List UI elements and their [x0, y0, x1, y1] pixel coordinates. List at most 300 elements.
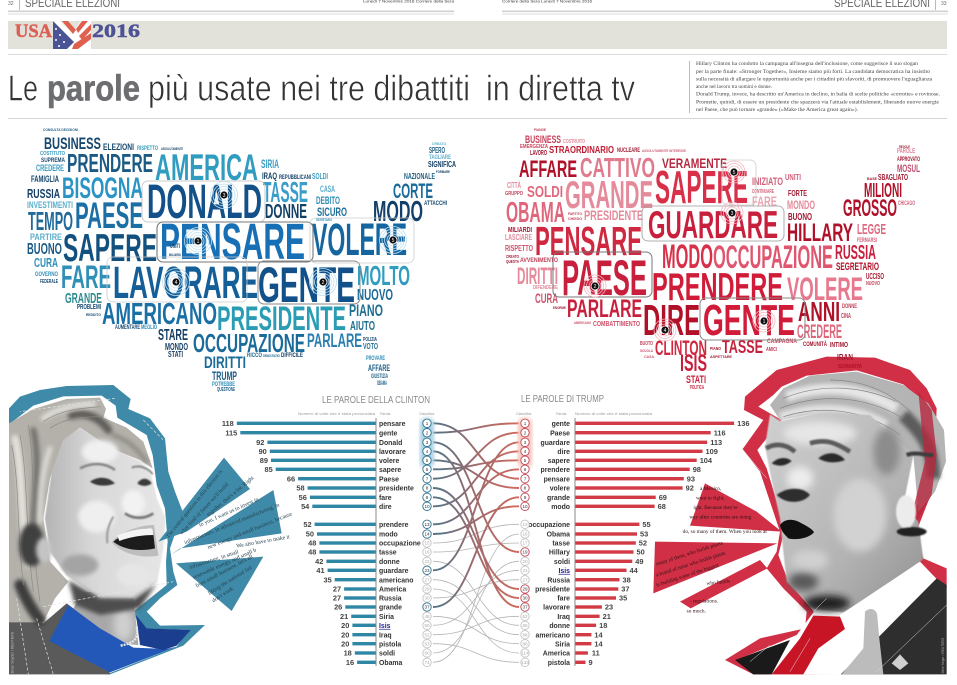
values: 14 [594, 639, 604, 648]
word cloud: Clinton: ASSOLUTAMENTE [161, 147, 183, 151]
word cloud: Clinton: PRENDERE [67, 148, 153, 178]
bars [237, 422, 376, 664]
word cloud: Clinton: DIFFICILE [281, 353, 303, 359]
word cloud: Trump: FARE [752, 193, 777, 209]
values: 48 [308, 548, 316, 557]
word cloud: Trump: MILIONI [864, 180, 902, 202]
portrait: Donald Trump: a brand of mine who builds plants [655, 550, 726, 579]
words: America [543, 651, 570, 658]
word cloud: Clinton: AMERICANO [102, 296, 217, 331]
words: Isis [379, 623, 391, 630]
portrait: Hillary Clinton: from small business, let's all [194, 553, 255, 589]
words: presidente [379, 486, 414, 493]
words: guardare [379, 568, 409, 575]
words: Paese [550, 430, 570, 437]
words: pensare [379, 421, 406, 428]
word cloud: Trump: PAROLE [897, 148, 915, 155]
word cloud: Trump: AFFARE [519, 156, 577, 183]
portrait: Donald Trump: ight. Because they're [693, 505, 738, 511]
word cloud: Clinton: DEMOCRATICI [263, 354, 280, 358]
word cloud: Trump: CHICAGO [898, 201, 915, 207]
word cloud: Trump: INTIMO [830, 340, 848, 349]
word cloud: Trump: MOSUL [897, 163, 920, 175]
rank circles: 9 [426, 495, 429, 500]
word cloud: Trump: AVVENIMENTO [520, 258, 558, 264]
portrait: Hillary Clinton: what kind of future we'll build [178, 481, 230, 536]
rank circles: 52 [424, 632, 430, 637]
words: sapere [379, 467, 401, 474]
words: gente [379, 430, 398, 437]
word cloud: Trump: PRESIDENTE [584, 207, 643, 223]
shoulder [9, 603, 110, 674]
word cloud: Trump: MILIARDI [508, 227, 532, 234]
face [45, 428, 166, 598]
rank circles: 133 [521, 660, 529, 665]
outline shape [725, 357, 947, 674]
word cloud: Clinton: SIRIA [261, 157, 279, 171]
word cloud: Trump: MODO [662, 238, 713, 276]
chart heading: Clinton: LE PAROLE DELLA CLINTON [322, 395, 430, 406]
words: Hillary [549, 550, 570, 557]
values: 16 [346, 658, 354, 667]
portrait: Hillary Clinton: infrastructure, in small [188, 548, 240, 571]
word cloud: Clinton: COSTITUTO [40, 151, 65, 157]
word cloud: Trump: COMUNITÀ [803, 339, 827, 348]
values: 20 [341, 630, 349, 639]
word cloud: Trump: VERAMENTE [662, 155, 727, 171]
word cloud: Trump: IRAN [837, 352, 853, 362]
portrait: Hillary Clinton [9, 385, 294, 674]
rank markers: Trump: 2 [594, 284, 597, 290]
values: 35 [619, 594, 627, 603]
page header left: 32 [8, 1, 14, 7]
word cloud: Trump: UNITI [785, 173, 801, 182]
rank circles: 7 [524, 476, 527, 481]
rank markers: Clinton: 4 [175, 280, 178, 286]
values: 21 [340, 612, 348, 621]
word cloud: Clinton: SIGNIFICA [428, 160, 456, 169]
portrait: Donald Trump: many of them, who builds plants [655, 539, 724, 568]
rank circles: 37 [424, 605, 430, 610]
rank circles: 20 [522, 559, 528, 564]
eyes and brows [80, 464, 153, 543]
word cloud: Trump: LEGGE [857, 221, 886, 238]
word cloud: Trump: COMBATTIMENTO [593, 321, 640, 328]
jacket [49, 605, 177, 672]
column headers: Numero di volte che è stata pronunciata [298, 412, 375, 416]
brows and eyes [766, 441, 933, 502]
rank circles: 10 [424, 504, 430, 509]
values: 113 [710, 438, 722, 447]
word cloud: Trump: ANNI [798, 296, 840, 327]
word cloud: Trump: OCCUPAZIONE [713, 239, 833, 275]
rank circles: 22 [424, 559, 430, 564]
words: dire [557, 449, 570, 456]
words: Obama [379, 660, 403, 667]
values: 118 [222, 419, 234, 428]
portrait: Hillary Clinton: to you. I want us to invest in [198, 497, 260, 528]
shirt collar [817, 562, 937, 674]
rank circles: 6 [426, 467, 429, 472]
values: 92 [256, 438, 264, 447]
word cloud: Trump: ISIS [680, 350, 707, 377]
word cloud: Trump: CAMPAGNA [767, 339, 798, 345]
values: 27 [333, 594, 341, 603]
values: 37 [621, 585, 630, 594]
word cloud: Clinton: REPUBBLICANI [279, 174, 311, 181]
word cloud: Clinton: FARE [61, 259, 111, 295]
word cloud: Trump: MONDO [787, 198, 815, 212]
face [765, 412, 923, 612]
column headers: Parola [556, 412, 566, 416]
word cloud: Clinton: OBAMA [377, 381, 387, 387]
values: 56 [299, 493, 307, 502]
rank markers: Trump: 4 [664, 328, 667, 334]
tie [772, 616, 845, 674]
word cloud: Trump: RISPETTO [505, 244, 533, 253]
words: grande [379, 605, 402, 612]
word cloud: Clinton: PROVARE [366, 356, 385, 362]
portrait: Donald Trump: a Mexico, [700, 486, 721, 492]
word cloud: Trump: ASSOLUTAMENTE INTERESSE [642, 149, 687, 153]
word cloud: Clinton: FAMIGLIA [31, 174, 59, 184]
word cloud: Trump: FORTE [788, 189, 807, 198]
word cloud: Clinton: PARLARE [307, 331, 362, 352]
dark hair behind ear [19, 523, 44, 567]
portrait: Donald Trump: do, so many of them. When you look at [683, 528, 767, 535]
rank circles: 88 [522, 632, 528, 637]
rank markers: Clinton: 3 [223, 193, 226, 199]
top-five halo [518, 418, 532, 468]
word cloud: Clinton: AIUTO [350, 318, 375, 333]
values: 52 [639, 539, 647, 548]
rank circles: 50 [424, 623, 430, 628]
word cloud: Trump: SEGRETARIO [836, 261, 879, 273]
values: 50 [636, 548, 645, 557]
words: donne [549, 623, 570, 630]
left dark shoulder [735, 640, 790, 674]
portrait: Donald Trump: - regulations. [690, 598, 718, 604]
word cloud: Trump: SCHIARITA [838, 364, 862, 370]
word cloud: Trump: NUCLEARE [617, 148, 640, 154]
rank circles: 3 [426, 440, 429, 445]
values: 50 [306, 530, 314, 539]
page header right [502, 0, 948, 14]
red inside hair [913, 392, 937, 525]
words [379, 421, 421, 667]
word cloud: Trump: TASSE [722, 337, 763, 357]
word cloud: Trump: CASA [644, 354, 654, 359]
words: Obama [547, 532, 570, 539]
values: 104 [700, 456, 713, 465]
word cloud: Clinton: PAESE [75, 195, 143, 236]
words: volere [550, 486, 570, 493]
words: presidente [535, 587, 570, 594]
values: 20 [341, 621, 349, 630]
word cloud: Clinton: BUONO [27, 241, 62, 258]
rank circles: 3 [524, 440, 527, 445]
rank circles: 9 [524, 495, 527, 500]
column headers: Parola [380, 412, 390, 416]
values: 53 [640, 530, 648, 539]
rank circles: 8 [524, 486, 527, 491]
word cloud: Clinton: IRAQ [262, 171, 277, 181]
rank circles: 10 [522, 504, 528, 509]
rank circles: 1 [426, 421, 429, 426]
word cloud: Clinton: AMERICA [155, 147, 258, 188]
word cloud: Clinton: PIANO [349, 301, 383, 320]
title: più usate nei tre dibattiti [148, 68, 470, 108]
suit jacket [841, 578, 947, 674]
word cloud: Trump: SAPERE [655, 161, 748, 213]
column headers: Classifica [419, 412, 434, 416]
words: Paese [379, 476, 399, 483]
word cloud: Trump: NUOVO [866, 281, 880, 287]
photo credit: Brian Snyder / REUTERS [10, 631, 14, 673]
rank circles: 30 [424, 596, 430, 601]
word cloud: Trump: BASE [867, 176, 877, 181]
values: 116 [714, 428, 726, 437]
word cloud: Clinton: BUSINESS [44, 134, 101, 153]
word cloud: Trump: GROSSO [843, 195, 897, 222]
values: 136 [737, 419, 749, 428]
page header right: 33 [941, 1, 947, 7]
word cloud: Trump: PRENDERE [652, 266, 783, 309]
word cloud: Trump: COSTRUITO [563, 139, 585, 145]
word cloud: Trump: REGOLE [899, 145, 910, 149]
words: Russia [547, 577, 570, 584]
rank circles: 29 [522, 587, 528, 592]
word cloud: Clinton: MEGLIO [141, 325, 157, 331]
values: 93 [687, 474, 695, 483]
rank circles: 21 [522, 568, 528, 573]
column headers: Numero di volte che è stata pronunciata [575, 412, 652, 416]
values: 35 [323, 575, 332, 584]
rank markers: Trump [584, 161, 775, 341]
rank circles: 13 [522, 522, 528, 527]
word cloud: Trump: LASCIARE [505, 233, 532, 242]
word cloud: Trump: DIFENDERE [533, 285, 559, 291]
word cloud: Clinton: GRANDE [65, 290, 102, 307]
words: lavorare [543, 605, 570, 612]
portrait: Donald Trump: want to fight, [696, 494, 725, 501]
values: 41 [316, 566, 325, 575]
speech wedges [690, 483, 782, 532]
rank circles [521, 419, 529, 666]
values: 66 [287, 474, 295, 483]
word cloud: Clinton: POTREBBE [212, 382, 235, 388]
words: Russia [379, 596, 402, 603]
words: Siria [379, 614, 394, 621]
intro text block: anche nel lavoro tra uomini e donne. [696, 84, 772, 90]
words: fare [557, 596, 570, 603]
word cloud: Clinton: UNITI [170, 244, 180, 250]
word cloud: Trump: PENSARE [535, 218, 642, 264]
flag pin [892, 654, 908, 670]
portrait: Donald Trump: who builds [706, 579, 730, 587]
words: Iraq [379, 632, 392, 639]
values: 69 [659, 493, 667, 502]
word cloud: Clinton: PROBLEMI [77, 304, 101, 311]
portrait: Hillary Clinton: don't work [211, 586, 235, 604]
words: grande [547, 495, 570, 502]
word cloud: Trump: STATI [686, 374, 706, 386]
word cloud: Clinton: AUMENTARE [115, 325, 140, 331]
word cloud: Clinton: SPERO [429, 146, 445, 155]
word cloud: Trump: CITTÀ [507, 181, 521, 190]
logo: USA 2016 [15, 21, 140, 49]
word cloud: Trump: DIRE [643, 296, 700, 345]
word cloud: Clinton: CURA [34, 255, 58, 270]
words: occupazione [528, 522, 570, 529]
word cloud: Trump: RUSSIA [835, 242, 876, 264]
word cloud: Trump: CONTINUARE [752, 189, 774, 195]
word cloud: Clinton: ATTACCHI [424, 201, 447, 207]
values: 42 [315, 557, 323, 566]
rank circles: 53 [424, 641, 430, 646]
title: in diretta tv [486, 68, 635, 108]
words: Siria [555, 641, 570, 648]
portrait: Hillary Clinton: lifting the national fair [207, 564, 254, 597]
word cloud: Trump: PARTITO [568, 211, 582, 216]
values: 115 [225, 428, 237, 437]
rank circles [423, 419, 431, 666]
words: Donald [379, 440, 402, 447]
word cloud: Trump: CREATO [506, 254, 519, 259]
slope links between rankings [433, 423, 519, 662]
words: sapere [548, 458, 570, 465]
word cloud: Clinton: AFFARE [368, 363, 390, 373]
word cloud: Trump: EMERGENZA [520, 144, 548, 150]
words: tasse [552, 541, 570, 548]
title: Le [8, 68, 38, 108]
words: Isis [558, 568, 570, 575]
portrait: Donald Trump [653, 357, 947, 674]
word cloud: Clinton: DONALD [147, 176, 262, 229]
word cloud: Trump: AMICI [766, 347, 777, 353]
rank circles: 13 [424, 522, 430, 527]
word cloud: Clinton: MILIARDI [169, 252, 181, 257]
rank circles: 6 [524, 467, 527, 472]
values [588, 419, 749, 667]
values: 18 [599, 621, 607, 630]
word cloud: Trump: BUSINESS [525, 134, 561, 146]
values: 109 [706, 447, 718, 456]
intro text block: Donald Trump, invece, ha descritto un'America in declino, in balia di scelte politiche «corrotte» e rovinose. [696, 92, 940, 98]
rank circles: 27 [522, 577, 528, 582]
portrait: Hillary Clinton: The central question in this election is [165, 469, 224, 540]
values: 54 [301, 502, 310, 511]
word cloud: Trump: APPROVATO [897, 157, 920, 163]
word cloud: Trump: INIZIATO [752, 176, 783, 188]
portrait: Hillary Clinton: infrastructure, in advanced manufacturing, in [183, 501, 281, 546]
values: 89 [260, 456, 268, 465]
rank circles: 62 [522, 614, 528, 619]
words: soldi [379, 651, 395, 658]
words: lavorare [379, 449, 406, 456]
word cloud: Trump: OBAMA [506, 197, 565, 229]
intro text block: nel Paese, che può tornare «grande» («Make the America great again»). [696, 106, 858, 113]
intro text block: Promette, quindi, di essere un presidente che spazzerà via l'attuale establishment, liberando nuove energie [696, 100, 940, 106]
word cloud: Trump [505, 128, 920, 391]
values: 27 [333, 585, 341, 594]
values: 98 [693, 465, 701, 474]
word cloud: Clinton: POLIZIA [363, 337, 377, 343]
rank circles: 2 [426, 430, 429, 435]
word cloud: Clinton: SAPERE [63, 227, 157, 270]
word cloud: Clinton: VOLERE [312, 214, 407, 265]
words: donne [379, 559, 400, 566]
word cloud: Clinton: RISPETTO [137, 146, 158, 152]
word cloud: Trump: HILLARY [787, 219, 853, 247]
rank markers: Trump: 3 [731, 211, 734, 217]
word cloud: Trump: QUESTA [506, 259, 520, 264]
words: prendere [540, 467, 570, 474]
words: modo [379, 532, 398, 539]
rank circles: 29 [424, 587, 430, 592]
values [222, 419, 354, 667]
hand [842, 609, 883, 674]
word cloud: Clinton: BISOGNA [62, 172, 143, 205]
rank circles: 7 [426, 476, 429, 481]
hair [9, 398, 153, 622]
words: modo [551, 504, 570, 511]
word cloud: Clinton: ELEZIONI [103, 142, 134, 152]
words: volere [379, 458, 399, 465]
values: 38 [622, 575, 631, 584]
word cloud: Clinton: VOTO [363, 342, 378, 351]
word cloud: Trump: GRUPPO [505, 191, 523, 197]
word cloud: Trump: DIRITTI [517, 263, 558, 290]
word cloud: Trump: GRANDE [565, 174, 653, 217]
word cloud: Clinton: MODO [373, 196, 423, 228]
word cloud: Clinton: NUOVO [357, 287, 393, 304]
word cloud: Trump: PIANGE [534, 128, 547, 132]
rank circles: 114 [521, 651, 529, 656]
values: 58 [296, 484, 305, 493]
word cloud: Clinton: STATI [168, 350, 183, 359]
word cloud: Trump: SCUOLA [640, 348, 653, 353]
portrait: Donald Trump: way after countries are doing [689, 513, 752, 520]
word cloud: Clinton: RICCO [247, 353, 262, 359]
word cloud: Trump: SOLDI [527, 184, 563, 201]
word cloud: Trump: CHIEDO [568, 216, 582, 221]
necklace [120, 627, 137, 646]
word cloud: Trump: BUOTO [640, 341, 653, 347]
words: Iraq [557, 614, 570, 621]
portrait: Hillary Clinton: new energy and small business, because [207, 511, 294, 551]
rank circles: 8 [426, 486, 429, 491]
word cloud: Clinton: TAGLIARE [429, 155, 451, 161]
values: 92 [686, 484, 694, 493]
rank circles: 60 [424, 651, 430, 656]
neck [73, 592, 138, 645]
words: pistola [548, 660, 570, 667]
title [8, 68, 635, 108]
word cloud: Clinton: FORMARE [436, 170, 451, 174]
rank circles: 5 [524, 458, 527, 463]
word cloud: Trump: VOLERE [787, 271, 863, 307]
word cloud: Clinton: MOLTO [357, 260, 410, 291]
word cloud: Trump: PIANO [710, 346, 721, 351]
words: occupazione [379, 541, 421, 548]
word cloud: Trump: CLINTON [655, 337, 707, 360]
rank circles: 4 [524, 449, 527, 454]
words: pistola [379, 641, 401, 648]
word cloud: Trump: CINA [841, 313, 851, 320]
word cloud: Trump: CATTIVO [580, 152, 655, 183]
rank circles: 27 [424, 577, 430, 582]
